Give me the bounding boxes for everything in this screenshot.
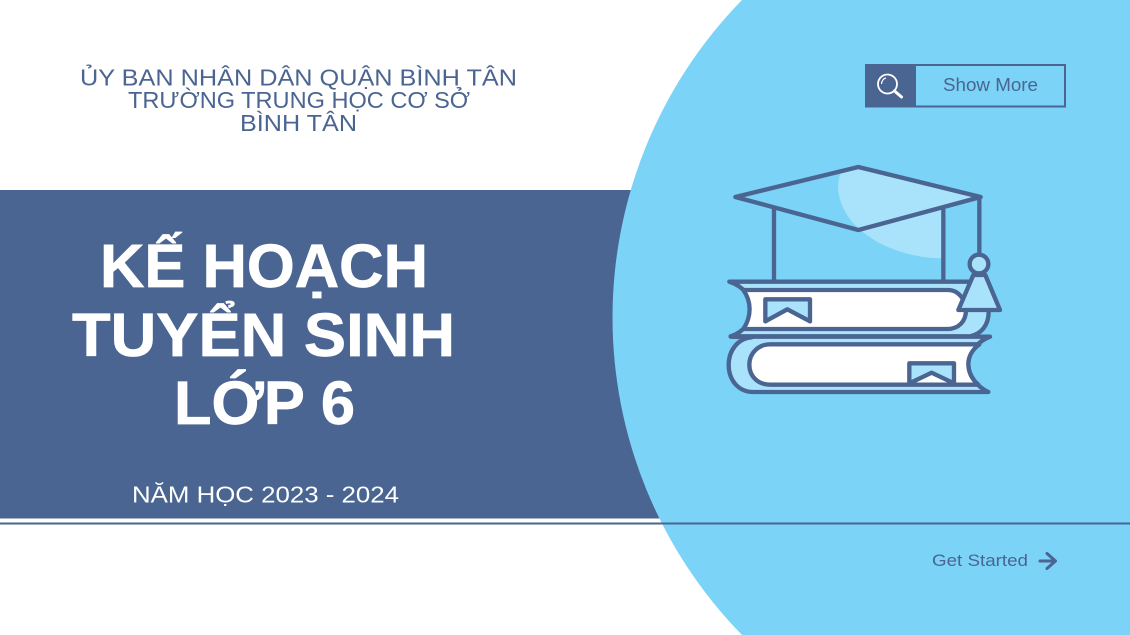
cap top	[735, 167, 981, 230]
title	[72, 232, 455, 437]
light blue circle	[613, 0, 1130, 635]
horizontal rule	[0, 522, 1130, 524]
cap sides	[774, 208, 943, 282]
panel: title band	[0, 190, 680, 518]
tassel cord	[973, 197, 986, 255]
title: TUYỂN SINH	[72, 301, 455, 369]
bookmark	[765, 299, 810, 321]
heading: school name: TRƯỜNG TRUNG HỌC CƠ SỞ	[128, 85, 470, 113]
button: show more: Show More	[943, 75, 1038, 95]
heading: school name: ỦY BAN NHÂN DÂN QUẬN BÌNH TÂN	[80, 62, 517, 90]
icon: magnifier	[878, 74, 902, 97]
title: LỚP 6	[174, 369, 355, 437]
heading: school name	[80, 62, 517, 136]
title: KẾ HOẠCH	[100, 232, 428, 300]
bookmark	[909, 363, 954, 383]
subtitle: school year: NĂM HỌC 2023 - 2024	[132, 482, 399, 508]
icon: arrow	[1040, 554, 1056, 568]
link: get started: Get Started	[932, 551, 1028, 570]
icon: graduation cap on books	[729, 167, 1000, 392]
cap highlight	[838, 167, 980, 258]
bottom book	[729, 337, 990, 392]
tassel	[958, 255, 1000, 310]
top book	[729, 282, 989, 336]
button: show more	[865, 64, 1065, 108]
heading: school name: BÌNH TÂN	[240, 110, 357, 136]
